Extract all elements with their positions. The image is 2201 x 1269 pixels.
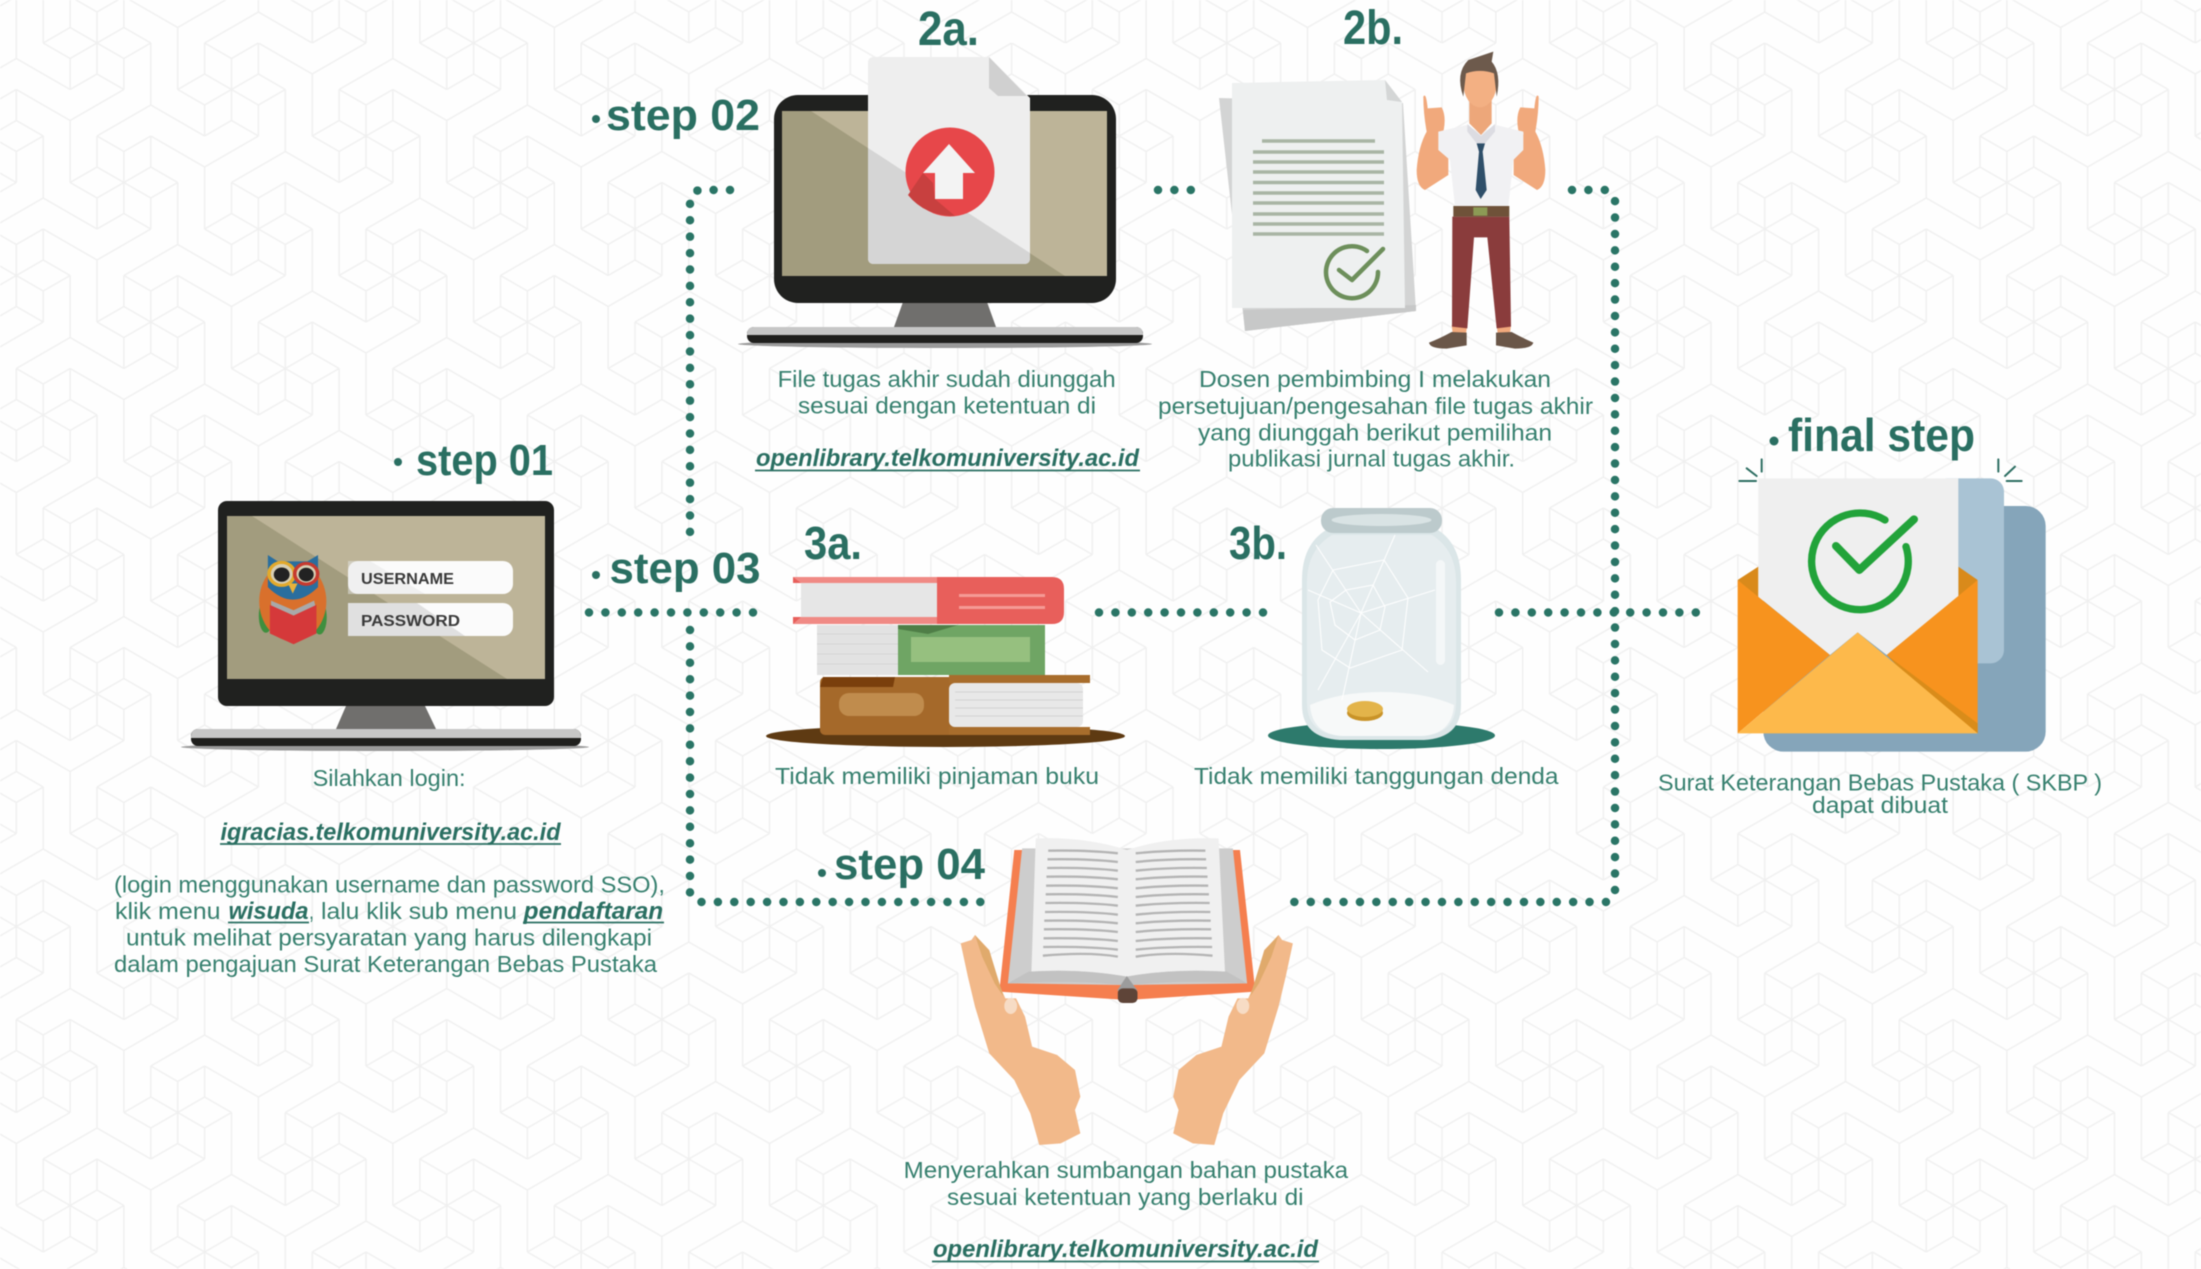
text: login instructions: dalam pengajuan Surat Keterangan Bebas Pustaka <box>114 951 658 977</box>
text: final step description: dapat dibuat <box>1812 792 1948 818</box>
text: login instructions: igracias.telkomuniversity.ac.id <box>220 819 562 846</box>
dotted connector: 3b to final step <box>1499 608 1702 617</box>
text: step 04 description <box>904 1157 1349 1263</box>
text: login instructions: , <box>309 898 314 924</box>
text: login instructions <box>114 765 665 977</box>
text: 3a description: Tidak memiliki pinjaman buku <box>775 763 1099 789</box>
right hand <box>1173 935 1293 1145</box>
dotted connector: step 01 to step 03 <box>589 608 756 617</box>
text: step 04 description: openlibrary.telkomuniversity.ac.id <box>933 1236 1319 1263</box>
text: 2a description: openlibrary.telkomuniversity.ac.id <box>756 445 1140 472</box>
cobweb <box>1308 535 1435 700</box>
dotted connector: 2b to right vertical and bottom <box>1287 190 1615 902</box>
panel: step 3b no fines <box>1194 508 1559 789</box>
heading: final step: final step <box>1788 409 1975 461</box>
coin <box>1347 701 1383 721</box>
icon: owl mascot <box>259 555 327 644</box>
icon: document with upload arrow <box>868 57 1030 264</box>
text: login instructions: klik menu <box>115 898 220 924</box>
text: login instructions: (login menggunakan username dan password SSO), <box>114 872 665 898</box>
heading: 3a: 3a. <box>804 517 862 569</box>
left hand <box>961 935 1080 1145</box>
icon: open book held by hands <box>961 838 1293 1145</box>
icon: login monitor <box>181 501 589 751</box>
dotted connector: step 02 top left and vertical <box>690 190 730 535</box>
dotted connector: 2a to 2b <box>1158 186 1192 194</box>
panel: final step <box>1658 409 2102 818</box>
sparks <box>1739 459 2022 481</box>
text: 2a description <box>755 366 1140 472</box>
text: 3b description: Tidak memiliki tanggungan denda <box>1194 763 1559 789</box>
icon: man giving thumbs up <box>1417 52 1545 349</box>
panel: step 04 donation <box>818 838 1349 1263</box>
text: 2b description <box>1158 366 1593 472</box>
panel: step 01 login <box>114 436 665 977</box>
heading: step 03: step 03 <box>610 544 760 593</box>
login fields: PASSWORD <box>361 613 460 630</box>
icon: upload monitor <box>738 57 1152 348</box>
panel: step 2a upload <box>738 3 1152 472</box>
dotted connector: vertical down to step 04 <box>690 630 984 902</box>
heading: 2b: 2b. <box>1343 2 1403 55</box>
text: 2b description: publikasi jurnal tugas akhir. <box>1228 446 1515 472</box>
text: 2a description: File tugas akhir sudah diunggah <box>778 366 1116 392</box>
text: 2b description: persetujuan/pengesahan file tugas akhir <box>1158 393 1593 419</box>
icon: stack of books <box>766 577 1125 747</box>
text: step 04 description: Menyerahkan sumbangan bahan pustaka <box>904 1157 1349 1183</box>
text: step 04 description: sesuai ketentuan yang berlaku di <box>947 1184 1304 1210</box>
panel: step 3a no loans <box>766 517 1125 789</box>
heading: step 01: step 01 <box>416 436 553 485</box>
icon: envelope with checked letter <box>1738 459 2046 752</box>
book <box>999 838 1255 1003</box>
text: 2b description: yang diunggah berikut pemilihan <box>1198 420 1552 446</box>
text: final step description <box>1658 770 2102 818</box>
text: login instructions: Silahkan login: <box>313 765 466 791</box>
heading: 3b: 3b. <box>1229 517 1287 569</box>
icon: empty jar with cobweb and coin <box>1268 508 1495 749</box>
text: 2a description: sesuai dengan ketentuan di <box>798 392 1096 418</box>
heading: step 02: step 02 <box>606 91 760 140</box>
green book <box>817 625 1045 675</box>
login fields: USERNAME <box>361 571 454 588</box>
panel: step 2b approval <box>1158 2 1593 472</box>
brown book <box>820 675 1090 735</box>
text: login instructions: pendaftaran <box>523 898 663 925</box>
icon: approved document <box>1219 80 1416 331</box>
dotted connector: 3a to 3b <box>1099 608 1271 617</box>
text: login instructions: lalu klik sub menu <box>321 898 517 924</box>
heading: 2a: 2a. <box>918 3 979 56</box>
text: login instructions: untuk melihat persyaratan yang harus dilengkapi <box>126 924 652 950</box>
text: 2b description: Dosen pembimbing I melakukan <box>1199 366 1551 392</box>
heading: step 04: step 04 <box>834 840 986 889</box>
text: login instructions: wisuda <box>228 898 308 925</box>
red book <box>793 577 1064 624</box>
login fields <box>348 561 513 636</box>
text: final step description: Surat Keterangan Bebas Pustaka ( SKBP ) <box>1658 770 2102 796</box>
